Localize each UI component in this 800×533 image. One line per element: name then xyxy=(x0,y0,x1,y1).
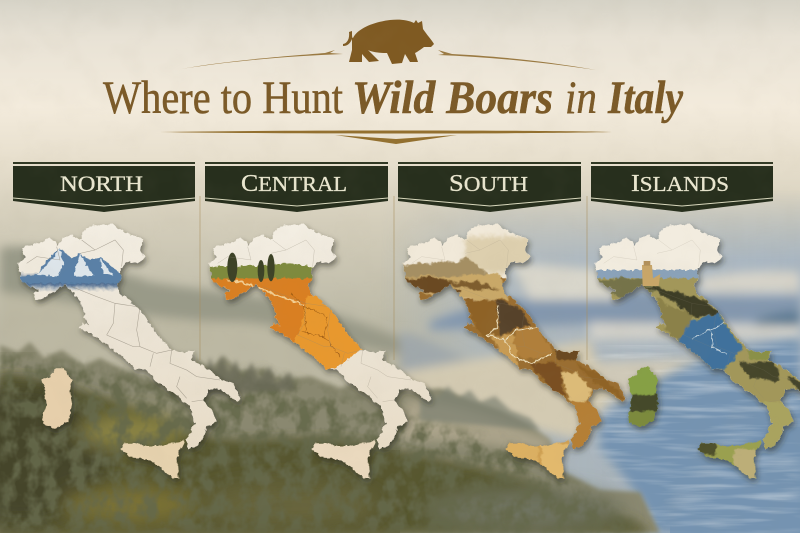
forest xyxy=(0,342,660,533)
map: Italy with islands highlighted xyxy=(577,217,800,480)
banner: Central: CENTRAL xyxy=(241,171,347,197)
bottom flourish xyxy=(160,130,612,144)
title: Where to Hunt xyxy=(103,72,343,124)
banner: South: SOUTH xyxy=(449,171,528,197)
banner: South xyxy=(398,162,581,212)
banner: Islands xyxy=(591,162,773,212)
title block xyxy=(103,20,683,144)
top flourish xyxy=(181,50,596,70)
cypress trees xyxy=(227,253,275,282)
map: Italy with central region highlighted xyxy=(208,224,435,484)
banner: North xyxy=(13,162,195,212)
panel: South xyxy=(385,162,638,480)
banner: Islands: ISLANDS xyxy=(631,171,729,197)
panel: Islands xyxy=(577,162,800,480)
title: in xyxy=(565,72,597,124)
water xyxy=(600,340,800,533)
title: Wild Boars xyxy=(352,72,553,124)
panel: Central xyxy=(191,162,444,478)
map: Italy with southern region highlighted xyxy=(402,224,630,484)
icon: castle tower xyxy=(642,261,660,286)
panel: North xyxy=(0,162,253,478)
distant hills xyxy=(0,246,800,440)
banner: North: NORTH xyxy=(60,171,143,196)
banner: Central xyxy=(205,162,388,212)
panel divider lines xyxy=(200,196,587,360)
title: Italy xyxy=(607,72,683,124)
map: Italy with Alps highlighted xyxy=(17,224,244,484)
icon: wild boar xyxy=(343,20,434,64)
